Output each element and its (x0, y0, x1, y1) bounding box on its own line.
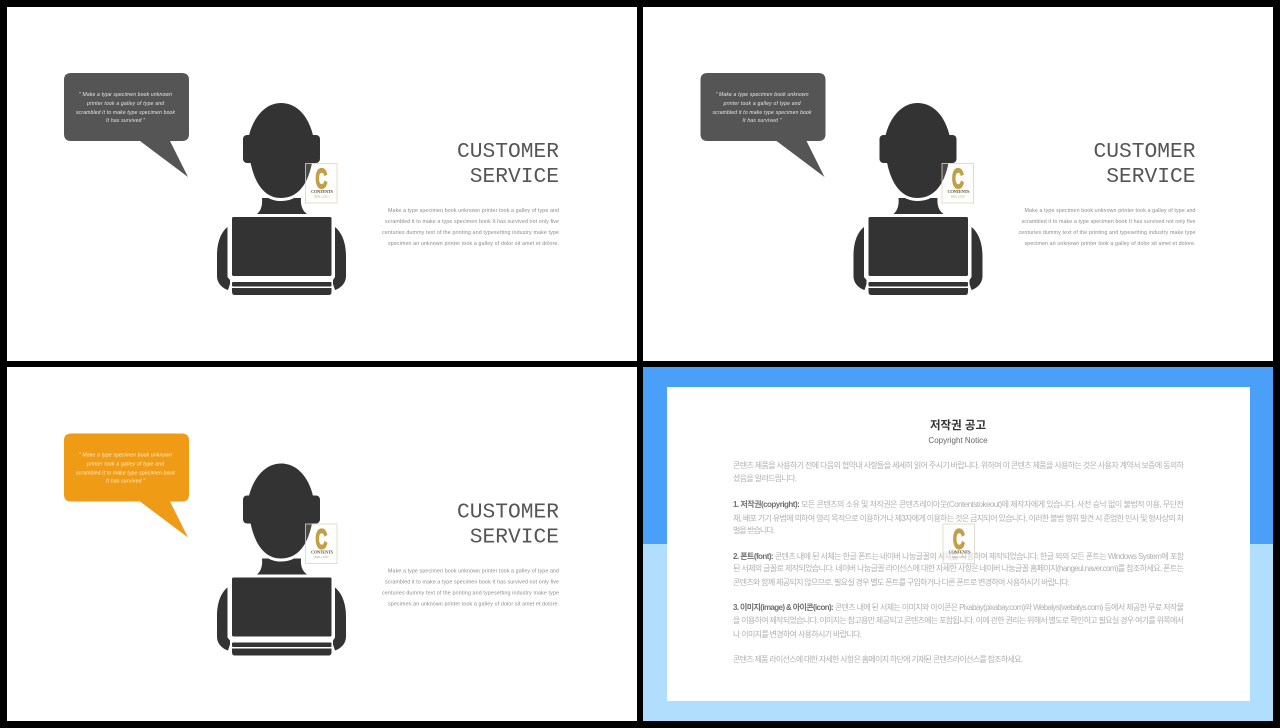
section 1: copyright: 벌을 받습니다. (733, 525, 775, 535)
speech bubble: " Make a type specimen book unknown (79, 92, 172, 98)
speech bubble (64, 73, 189, 177)
body text: Make a type specimen book unknown printer took a galley of type and (388, 568, 559, 574)
logo watermark: REAL LOGO (314, 196, 329, 198)
logo watermark: CONTENTS (311, 189, 333, 194)
section 2: font: 된 서체의 글꼴로 제작되었습니다. 네이버 나눔글꼴 라이선스에 대한 자세한 사항은 네이버 나눔글꼴 홈페이지(hangeul.naver.com)를 참조하세요. 폰트는 (733, 563, 1184, 573)
speech bubble: " Make a type specimen book unknown (716, 92, 809, 98)
logo watermark (942, 162, 974, 203)
body text: scrambled it to make a type specimen book It has survived not only five (1022, 219, 1196, 225)
copyright heading: 저작권 공고 (930, 418, 986, 432)
logo watermark (306, 523, 337, 564)
body text (382, 568, 559, 608)
body text: scrambled it to make a type specimen book It has survived not only five (385, 219, 559, 225)
title: SERVICE (470, 526, 559, 550)
logo watermark: REAL LOGO (314, 556, 329, 559)
speech bubble: scrambled it to make type specimen book (76, 470, 176, 476)
title: CUSTOMER (457, 500, 559, 524)
logo watermark: CONTENTS (948, 550, 971, 554)
body text: scrambled it to make a type specimen book It has survived not only five (385, 580, 559, 586)
title: CUSTOMER (457, 140, 559, 164)
speech bubble (64, 434, 189, 538)
body text: specimen an unknown printer took a galley of dolor sit amet et dolore. (388, 602, 559, 608)
title: SERVICE (1106, 165, 1196, 189)
panel: customer service, dark bubble copy (643, 7, 1273, 361)
section 3: image and icon: 나 이미지를 변경하여 사용하시기 바랍니다. (733, 629, 862, 639)
body text (1018, 208, 1196, 247)
section 3: image and icon (733, 602, 1184, 639)
speech bubble: scrambled it to make type specimen book (712, 110, 812, 116)
speech bubble (700, 73, 826, 177)
body text: centuries dummy text of the printing and typesetting industry make type (382, 230, 559, 236)
body text: specimen an unknown printer took a galley of dolor sit amet et dolore. (388, 241, 559, 247)
speech bubble: printer took a galley of type and (722, 101, 801, 107)
logo watermark: C (953, 523, 965, 555)
panel: customer service, orange bubble (7, 367, 637, 721)
section 2: font: 콘텐츠와 함께 제공되지 않으므로, 필요실 경우 별도 폰트를 구입하거나 다른 폰트로 변경하여 사용하시기 바랍니다. (733, 577, 1070, 587)
panel: copyright notice (643, 367, 1273, 721)
speech bubble: scrambled it to make type specimen book (76, 110, 176, 116)
logo watermark (943, 523, 974, 564)
logo watermark (306, 162, 337, 203)
logo watermark: CONTENTS (948, 189, 970, 194)
section 1: copyright: 1. 저작권(copyright): 모든 콘텐츠의 소유 및 저작권은 콘텐츠레이아웃(Contentstokeout)에 제작자에게 있습니다. 사전 승낙 없이 불법적 이용, 무단전 (733, 499, 1184, 509)
icon: person at laptop (217, 100, 346, 295)
section 2: font: 2. 폰트(font): 콘텐츠 내에 된 서체는 한글 폰트는 네이버 나눔글꼴의 서체를 사용하여 제작되었습니다. 한글 외의 모든 폰트는 Windows System에 포함 (733, 551, 1185, 561)
body text: Make a type specimen book unknown printer took a galley of type and (388, 208, 559, 214)
icon: person at laptop (854, 100, 982, 295)
speech bubble: It has survived " (742, 118, 782, 124)
body text: Make a type specimen book unknown printer took a galley of type and (1024, 208, 1196, 214)
intro paragraph: 콘텐츠 제품을 사용하기 전에 다음의 협약내 사항들을 세세히 읽어 주시기 바랍니다. 위하여 이 콘텐츠 제품을 사용하는 것은 사용자 계약서 보증에 동의하 (733, 460, 1185, 470)
body text: centuries dummy text of the printing and typesetting industry make type (1018, 230, 1196, 236)
panel: customer service, dark bubble (7, 7, 637, 361)
section 1: copyright (733, 499, 1184, 535)
body text: specimen an unknown printer took a galley of dolor sit amet et dolore. (1024, 241, 1196, 247)
intro paragraph: 셨음을 알려드립니다. (733, 473, 797, 483)
section 3: image and icon: 3. 이미지(image) & 아이콘(icon): 콘텐츠 내에 된 서체는 이미지와 아이콘은 Pixabay(pixabay.com)와 Webalys(webalys.com) 등에서 제공한 무료 저작물 (733, 602, 1184, 612)
section 3: image and icon: 을 이용하여 제작되었습니다. 이미지는 참고용만 제공되고 콘텐츠에는 포함됩니다. 이에 관한 권리는 위해서 별도로 확인하고 필요실 경우 여기를 위쪽에서 (733, 615, 1184, 625)
title: CUSTOMER (1094, 140, 1196, 164)
copyright heading: Copyright Notice (928, 436, 988, 445)
speech bubble: printer took a galley of type and (86, 101, 164, 107)
copyright heading (928, 418, 988, 445)
logo watermark: C (952, 162, 964, 194)
section 2: font (733, 551, 1185, 587)
section 1: copyright: 재, 배포 기기 유법에 의하여 영리 목적으로 이용하거나 제3자에게 이용하는 것은 금지되어 있습니다. 이러한 불법 행위 발견 시 준엄한 민사 및 형사상의 처 (733, 513, 1184, 523)
speech bubble: It has survived " (106, 118, 145, 124)
logo watermark: C (316, 162, 327, 194)
body text: centuries dummy text of the printing and typesetting industry make type (382, 590, 559, 596)
body text (382, 208, 559, 247)
title: SERVICE (470, 165, 559, 189)
speech bubble: printer took a galley of type and (86, 462, 164, 468)
logo watermark: REAL LOGO (951, 196, 965, 198)
title (457, 500, 559, 550)
title (1094, 140, 1196, 189)
logo watermark: REAL LOGO (952, 556, 966, 559)
title (457, 140, 559, 189)
speech bubble: " Make a type specimen book unknown (79, 452, 172, 458)
logo watermark: CONTENTS (311, 550, 333, 554)
speech bubble: It has survived " (106, 478, 145, 484)
icon: person at laptop (217, 461, 346, 656)
closing note: 콘텐츠 제품 라이선스에 대한 자세한 사항은 홈페이지 하단에 기재된 콘텐츠라이선스를 참조하세요. (733, 654, 1023, 664)
intro paragraph (733, 460, 1185, 483)
logo watermark: C (316, 523, 327, 555)
